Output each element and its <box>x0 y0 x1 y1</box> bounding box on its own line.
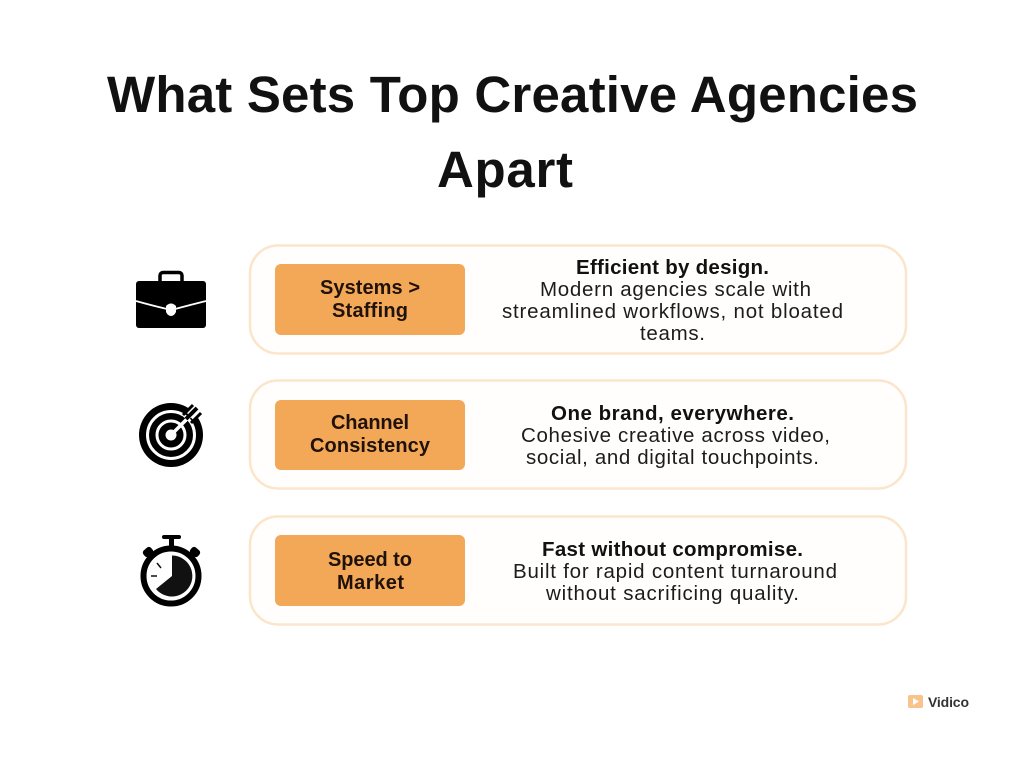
label: systems over staffing <box>275 264 465 335</box>
label: speed to market <box>275 535 465 606</box>
label: channel consistency <box>275 400 465 470</box>
description: fast without compromise: Built for rapid content turnaround <box>513 560 837 583</box>
label: channel consistency: Consistency <box>310 435 431 457</box>
title <box>107 66 918 198</box>
label: speed to market: Market <box>337 572 404 594</box>
label: channel consistency: Channel <box>331 412 409 434</box>
logo: Vidico: Vidico <box>928 694 969 710</box>
title: What Sets Top Creative Agencies <box>107 66 918 123</box>
icon: briefcase <box>136 272 206 328</box>
description: fast without compromise: Fast without compromise. <box>542 538 803 561</box>
description: efficient by design <box>502 256 843 345</box>
description: fast without compromise: without sacrificing quality. <box>545 582 799 605</box>
description: one brand everywhere: social, and digital touchpoints. <box>526 446 819 469</box>
description: efficient by design: teams. <box>640 322 705 345</box>
icon: stopwatch <box>142 535 201 604</box>
title: Apart <box>437 141 573 198</box>
description: one brand everywhere: Cohesive creative across video, <box>521 424 830 447</box>
description: one brand everywhere: One brand, everywhere. <box>551 402 794 425</box>
description: fast without compromise <box>513 538 837 605</box>
label: systems over staffing: Systems > <box>320 277 420 299</box>
description: efficient by design: streamlined workflows, not bloated <box>502 300 843 323</box>
panel: channel consistency <box>250 380 906 488</box>
icon: target with arrow <box>139 402 206 467</box>
description: one brand everywhere <box>521 402 830 469</box>
description: efficient by design: Efficient by design. <box>576 256 769 279</box>
panel: speed to market <box>250 516 906 624</box>
logo: Vidico <box>908 694 969 710</box>
label: speed to market: Speed to <box>328 549 412 571</box>
label: systems over staffing: Staffing <box>332 300 408 322</box>
panel: systems over staffing <box>250 246 906 354</box>
description: efficient by design: Modern agencies scale with <box>540 278 811 301</box>
